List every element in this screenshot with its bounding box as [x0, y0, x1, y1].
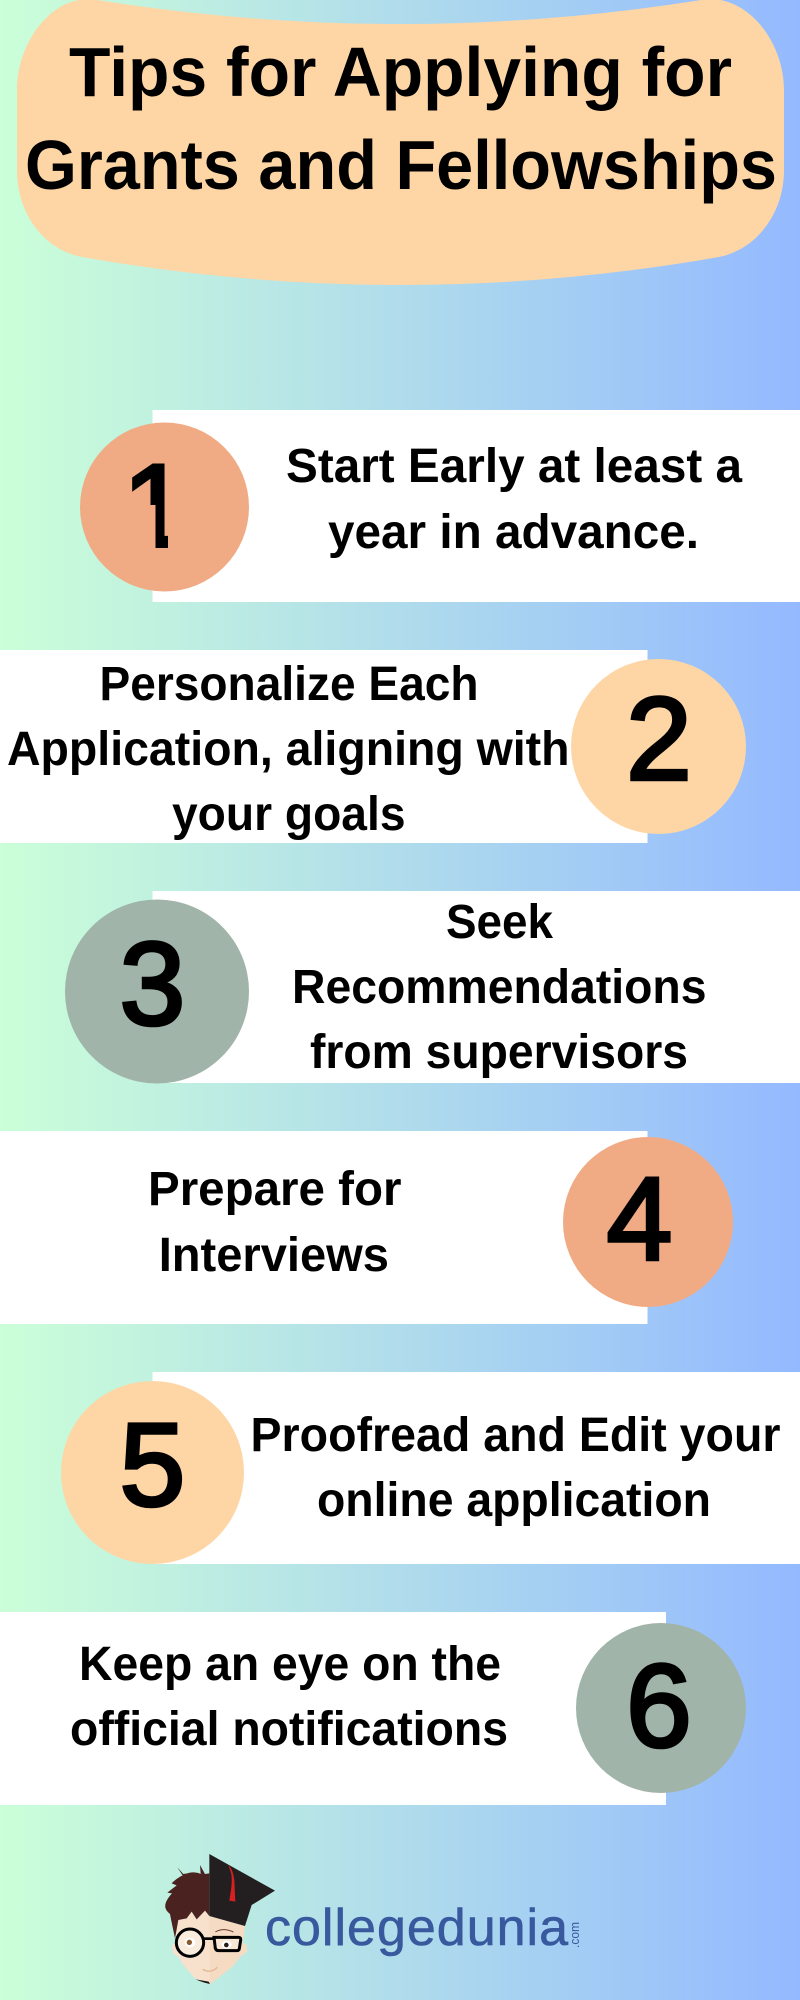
logo: collegedunia	[165, 1854, 582, 1984]
tip text: Interviews	[159, 1229, 389, 1282]
tip text: official notifications	[70, 1703, 508, 1756]
tip text: year in advance.	[328, 506, 699, 559]
title text: Tips for Applying for	[69, 33, 732, 111]
tip 6	[0, 1612, 746, 1805]
tip text: Prepare for	[148, 1163, 402, 1216]
tip 4	[0, 1131, 733, 1324]
number: 2	[626, 674, 692, 806]
face	[172, 1911, 247, 1984]
number circle	[571, 659, 746, 834]
band	[0, 650, 648, 843]
tip text: your goals	[172, 788, 406, 841]
tip text: Keep an eye on the	[79, 1638, 501, 1691]
graduation cap	[209, 1854, 275, 1926]
number circle	[563, 1137, 733, 1307]
eyes	[185, 1938, 232, 1949]
number: 6	[626, 1640, 692, 1772]
tip 1	[80, 410, 800, 602]
number circle	[65, 900, 249, 1084]
tip text	[148, 1163, 402, 1282]
icon: student head with graduation cap	[165, 1854, 275, 1984]
tip text: Start Early at least a	[286, 440, 742, 493]
number circle	[80, 422, 249, 592]
band	[152, 891, 800, 1083]
title text: Grants and Fellowships	[25, 126, 777, 204]
number circle	[576, 1623, 746, 1793]
wordmark suffix: .com	[567, 1922, 582, 1948]
number: 4	[607, 1154, 672, 1286]
tip text: online application	[317, 1474, 711, 1527]
hair	[165, 1865, 209, 1938]
tip 5	[61, 1372, 800, 1564]
wordmark: collegedunia	[265, 1899, 568, 1957]
number: 5	[120, 1400, 185, 1532]
tip text: Seek	[446, 896, 553, 949]
tip text: Proofread and Edit your	[250, 1409, 780, 1462]
band	[152, 1372, 800, 1564]
tassel	[228, 1865, 235, 1902]
tip text: Application, aligning with	[7, 723, 570, 776]
tip text: from supervisors	[310, 1026, 688, 1079]
glasses	[176, 1929, 241, 1956]
tip text	[292, 896, 706, 1079]
tip text	[70, 1638, 508, 1756]
band	[152, 410, 800, 602]
mouth	[203, 1967, 217, 1971]
tip text	[286, 440, 742, 559]
tip text	[250, 1409, 780, 1527]
number circle	[61, 1381, 244, 1564]
number: 1	[123, 440, 188, 572]
title text	[25, 33, 777, 204]
title banner	[17, 0, 784, 285]
band	[0, 1612, 666, 1805]
eyebrow	[215, 1930, 233, 1932]
chin	[196, 1979, 210, 1984]
tip text: Recommendations	[292, 961, 706, 1014]
tip 3	[65, 891, 800, 1084]
band	[0, 1131, 648, 1324]
face shade	[209, 1916, 247, 1984]
tip text: Personalize Each	[100, 658, 478, 711]
banner shape	[17, 0, 784, 285]
tip text	[7, 658, 570, 841]
tip 2	[0, 650, 746, 843]
number: 3	[120, 918, 185, 1050]
